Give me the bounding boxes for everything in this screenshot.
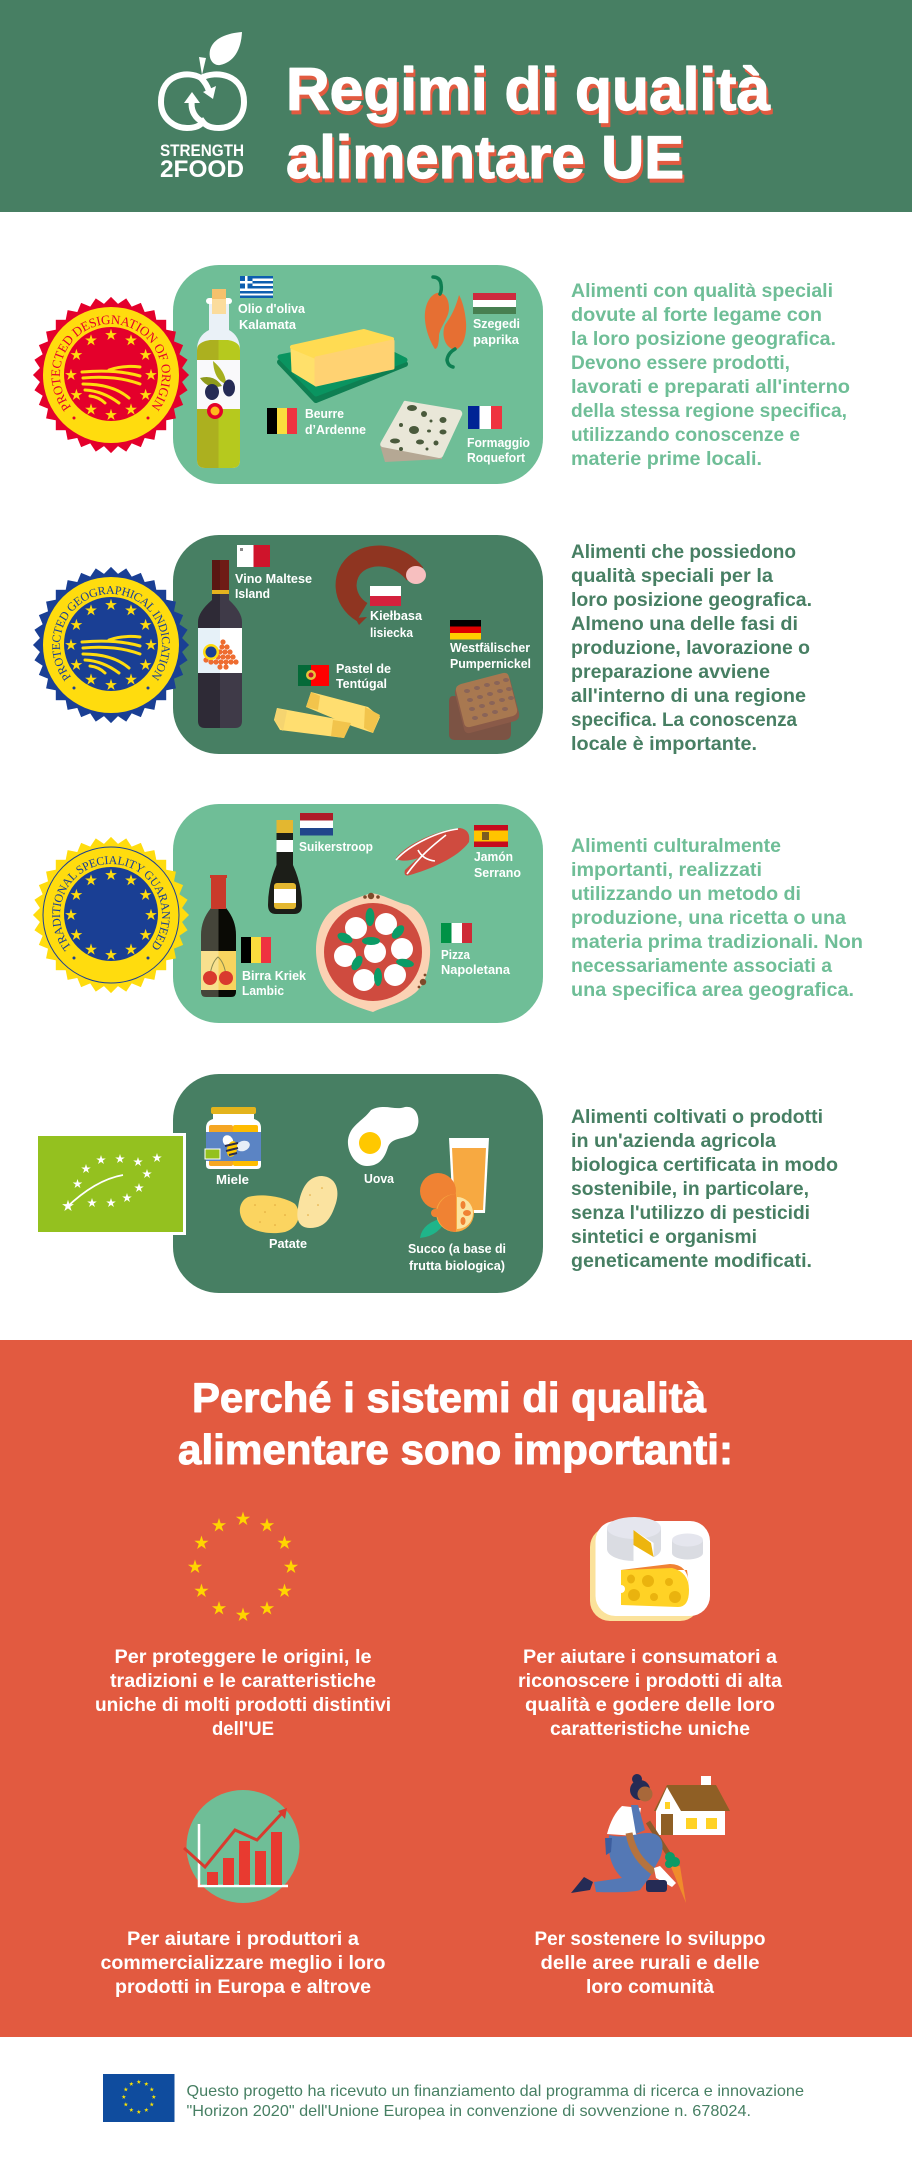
text: PDO description: utilizzando conoscenze e — [571, 425, 800, 446]
text: funding statement — [186, 2083, 804, 2120]
flag: Belgium — [241, 937, 271, 963]
label: Szegedi paprika: Szegedi — [473, 316, 520, 331]
panel: TSG foods — [173, 804, 543, 1023]
text: protect origins: uniche di molti prodotti distintivi — [95, 1695, 391, 1716]
text: help producers: commercializzare meglio i loro — [100, 1953, 386, 1974]
text: PGI description: Almeno una delle fasi di — [571, 614, 798, 635]
label: Pizza Napoletana: Pizza — [441, 947, 471, 962]
panel: PDO foods — [173, 265, 543, 484]
icon: pizza — [316, 893, 430, 1012]
flag: Netherlands — [300, 813, 333, 836]
text: PDO description: materie prime locali. — [571, 449, 762, 470]
label: Szegedi paprika: paprika — [473, 332, 520, 347]
icon: pumpernickel bread — [449, 673, 519, 740]
label: Westfälischer Pumpernickel: Westfälischer — [450, 640, 530, 655]
seal: PGI — [33, 567, 189, 723]
section: organic farming — [38, 1074, 838, 1293]
icon: pastel de Tentúgal — [274, 692, 380, 738]
label: Westfälischer Pumpernickel: Pumpernickel — [450, 656, 531, 671]
heading: alimentare sono importanti: — [178, 1426, 733, 1473]
label: Miele: Miele — [216, 1172, 249, 1187]
label: Jamón Serrano — [474, 849, 521, 880]
icon: wine bottle — [198, 560, 242, 728]
label: Jamón Serrano: Jamón — [474, 849, 513, 864]
section: traditional speciality guaranteed — [33, 804, 863, 1023]
icon: olive oil bottle — [197, 289, 240, 468]
label: Succo a base di frutta biologica: Succo (a base di — [408, 1241, 506, 1256]
text: PGI description: specifica. La conoscenza — [571, 710, 797, 731]
label: Kiełbasa lisiecka: lisiecka — [370, 625, 414, 640]
title — [286, 56, 771, 191]
heading: Perché i sistemi di qualità — [192, 1374, 707, 1421]
logo: EU organic leaf — [38, 1133, 186, 1235]
text: TSG description: materia prima tradizionali. Non — [571, 932, 863, 953]
label: Pizza Napoletana: Napoletana — [441, 962, 511, 977]
panel: PGI foods — [173, 535, 543, 754]
title: Regimi di qualità — [286, 56, 771, 123]
label: Succo a base di frutta biologica: frutta biologica) — [409, 1258, 505, 1273]
label: Suikerstroop: Suikerstroop — [299, 839, 373, 854]
icon: cheese plate — [590, 1517, 710, 1621]
text: help producers: Per aiutare i produttori a — [127, 1929, 359, 1950]
text: organic description: sintetici e organismi — [571, 1227, 757, 1248]
icon: butter on dish — [280, 331, 405, 400]
text: organic description: geneticamente modificati. — [571, 1251, 812, 1272]
text: PGI description: Alimenti che possiedono — [571, 542, 796, 563]
text: TSG description — [571, 836, 863, 1001]
logo: Strength2Food: 2FOOD — [160, 156, 244, 183]
label: Olio d'oliva Kalamata: Olio d'oliva — [238, 301, 306, 316]
label: Vino Maltese Island — [235, 571, 312, 601]
text: PDO description: lavorati e preparati all'interno — [571, 377, 850, 398]
text: help consumers — [518, 1647, 782, 1740]
label: Kiełbasa lisiecka — [370, 608, 423, 640]
text: TSG description: utilizzando un metodo di — [571, 884, 801, 905]
icon: honey jar — [205, 1107, 261, 1169]
icon: peppers — [425, 277, 466, 367]
text: funding statement: "Horizon 2020" dell'Unione Europea in convenzione di sovvenzione n. 678024. — [186, 2103, 751, 2120]
label: Olio d'oliva Kalamata — [238, 301, 306, 332]
footer — [103, 2074, 804, 2122]
text: PDO description: Alimenti con qualità speciali — [571, 281, 833, 302]
flag: Germany — [450, 620, 481, 640]
text: TSG description: importanti, realizzati — [571, 860, 762, 881]
label: Vino Maltese Island: Vino Maltese — [235, 571, 312, 586]
label: Uova: Uova — [364, 1171, 395, 1186]
text: organic description: senza l'utilizzo di pesticidi — [571, 1203, 810, 1224]
label: Succo a base di frutta biologica — [408, 1241, 506, 1273]
label: Szegedi paprika — [473, 316, 520, 347]
text: PDO description — [571, 281, 850, 470]
title: alimentare UE — [286, 124, 684, 191]
label: Pastel de Tentúgal: Tentúgal — [336, 676, 387, 691]
text: TSG description: necessariamente associati a — [571, 956, 832, 977]
icon: EU flag — [103, 2074, 174, 2122]
logo: Strength2Food: STRENGTH — [160, 141, 244, 160]
icon: EU stars — [188, 1512, 298, 1621]
label: Formaggio Roquefort — [467, 435, 530, 465]
flag: Hungary — [473, 293, 516, 314]
icon: syrup bottle — [268, 820, 302, 914]
text: help consumers: riconoscere i prodotti di alta — [518, 1671, 782, 1692]
text: protect origins: dell'UE — [212, 1719, 274, 1740]
label: Patate: Patate — [269, 1236, 307, 1251]
icon: growth chart — [184, 1790, 300, 1903]
label: Formaggio Roquefort: Roquefort — [467, 450, 526, 465]
text: PGI description: all'interno di una regione — [571, 686, 806, 707]
text: PGI description: preparazione avviene — [571, 662, 770, 683]
label: Birra Kriek Lambic: Lambic — [242, 983, 284, 998]
text: organic description: in un'azienda agricola — [571, 1131, 776, 1152]
text: rural development — [534, 1929, 766, 1998]
text: PGI description: loro posizione geografica. — [571, 590, 812, 611]
flag: Belgium — [267, 408, 297, 434]
icon: sausage — [346, 556, 426, 625]
text: protect origins — [95, 1647, 391, 1740]
seal: TSG: TRADITIONAL SPECIALITY GUARANTEED — [52, 856, 170, 952]
heading — [178, 1374, 733, 1473]
label: Beurre d'Ardenne: Beurre — [305, 406, 344, 421]
text: rural development: delle aree rurali e delle — [540, 1953, 760, 1974]
text: PGI description: locale è importante. — [571, 734, 757, 755]
text: help consumers: qualità e godere delle loro — [525, 1695, 775, 1716]
seal: PDO — [33, 297, 189, 453]
text: funding statement: Questo progetto ha ricevuto un finanziamento dal programma di ricerca e innovazione — [186, 2083, 804, 2100]
icon: beer bottle — [201, 875, 236, 997]
text: organic description: Alimenti coltivati o prodotti — [571, 1107, 823, 1128]
label: Birra Kriek Lambic: Birra Kriek — [242, 968, 307, 983]
panel: organic foods — [173, 1074, 543, 1293]
text: help consumers: Per aiutare i consumatori a — [523, 1647, 777, 1668]
flag: Poland — [370, 586, 401, 606]
text: rural development: loro comunità — [586, 1977, 714, 1998]
text: organic description — [571, 1107, 838, 1272]
label: Kiełbasa lisiecka: Kiełbasa — [370, 608, 423, 623]
text: organic description: sostenibile, in particolare, — [571, 1179, 809, 1200]
icon: fried egg — [348, 1107, 418, 1166]
text: help producers: prodotti in Europa e altrove — [115, 1977, 371, 1998]
text: help consumers: caratteristiche uniche — [550, 1719, 750, 1740]
section: protected geographical indication — [33, 535, 812, 755]
label: Pastel de Tentúgal: Pastel de — [336, 661, 391, 676]
icon: jamón serrano — [396, 828, 469, 875]
flag: Greece — [240, 276, 273, 298]
text: PGI description: qualità speciali per la — [571, 566, 773, 587]
text: TSG description: una specifica area geografica. — [571, 980, 854, 1001]
label: Pastel de Tentúgal — [336, 661, 391, 691]
label: Formaggio Roquefort: Formaggio — [467, 435, 530, 450]
text: rural development: Per sostenere lo sviluppo — [534, 1929, 766, 1950]
text: protect origins: tradizioni e le caratteristiche — [110, 1671, 376, 1692]
flag: Italy — [441, 923, 472, 943]
label: Pizza Napoletana — [441, 947, 511, 977]
text: PDO description: della stessa regione specifica, — [571, 401, 847, 422]
flag: Malta — [237, 545, 270, 567]
text: organic description: biologica certificata in modo — [571, 1155, 838, 1176]
header banner — [0, 0, 912, 212]
label: Beurre d'Ardenne — [305, 406, 366, 437]
label: Westfälischer Pumpernickel — [450, 640, 531, 671]
icon: potatoes — [240, 1176, 337, 1233]
label: Vino Maltese Island: Island — [235, 586, 270, 601]
text: TSG description: produzione, una ricetta o una — [571, 908, 846, 929]
section: protected designation of origin — [33, 265, 850, 484]
text: help producers — [100, 1929, 386, 1998]
text: PDO description: Devono essere prodotti, — [571, 353, 790, 374]
text: PDO description: la loro posizione geografica. — [571, 329, 836, 350]
text: PDO description: dovute al forte legame con — [571, 305, 822, 326]
label: Birra Kriek Lambic — [242, 968, 307, 998]
label: Olio d'oliva Kalamata: Kalamata — [239, 317, 297, 332]
icon: juice and oranges — [420, 1138, 489, 1238]
text: protect origins: Per proteggere le origini, le — [114, 1647, 372, 1668]
flag: Portugal — [298, 665, 329, 686]
seal: PDO: PROTECTED DESIGNATION OF ORIGIN — [51, 315, 171, 412]
logo: Strength2Food — [160, 32, 244, 183]
text: PGI description — [571, 542, 812, 755]
text: TSG description: Alimenti culturalmente — [571, 836, 781, 857]
seal: TSG — [33, 837, 189, 993]
panel: why quality schemes matter — [0, 1340, 912, 2037]
label: Beurre d'Ardenne: d’Ardenne — [305, 422, 366, 437]
flag: France — [468, 406, 502, 429]
label: Jamón Serrano: Serrano — [474, 865, 521, 880]
seal: PGI: PROTECTED GEOGRAPHICAL INDICATION — [52, 586, 170, 682]
icon: roquefort — [380, 401, 462, 462]
text: PGI description: produzione, lavorazione o — [571, 638, 810, 659]
icon: farmer and house — [571, 1774, 730, 1903]
flag: Spain — [474, 825, 508, 847]
